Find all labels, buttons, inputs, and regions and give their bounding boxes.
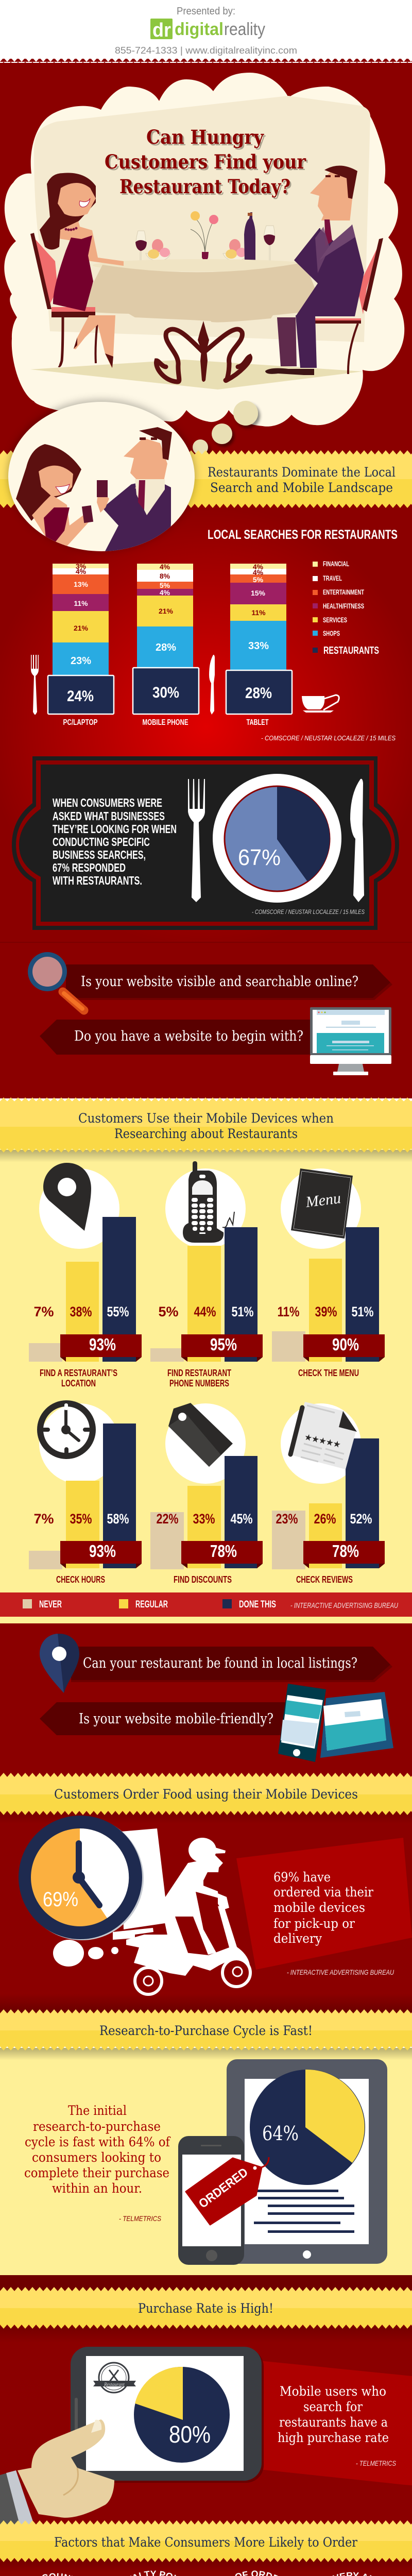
icon: restaurant badge — [93, 2363, 136, 2393]
logo: digital reality: dr — [152, 20, 171, 41]
chart legend: HEALTH/FITNESS — [323, 602, 364, 610]
bar chart: find discounts: FIND DISCOUNTS — [174, 1574, 232, 1585]
bar: pc laptop: 13% — [74, 580, 89, 588]
bar chart: find discounts: 45% — [231, 1511, 252, 1527]
panel: purchase rate note: restaurants have a — [279, 2415, 388, 2430]
bar: pc laptop — [48, 562, 114, 727]
panel: purchase rate note — [259, 2361, 412, 2485]
bar chart: phone numbers: PHONE NUMBERS — [169, 1378, 229, 1388]
clock chart 69 percent: 69% — [43, 1888, 78, 1911]
bar chart: phone numbers: 51% — [232, 1304, 253, 1319]
question banner: mobile friendly: Is your website mobile-friendly? — [79, 1711, 273, 1727]
panel: red note: delivery — [273, 1931, 322, 1946]
bar chart: check reviews: 23% — [276, 1511, 298, 1527]
heading text: Customers Use their Mobile Devices when — [78, 1111, 334, 1126]
illustration: hand holding tablet — [0, 2419, 114, 2524]
bar: pc laptop: 24% — [67, 688, 94, 705]
bar chart: check menu — [272, 1168, 385, 1378]
section heading band: mobile research — [0, 1097, 412, 1162]
bar: tablet — [226, 563, 292, 727]
question banner: mobile friendly — [40, 1702, 288, 1735]
plate and pie: 67% — [238, 845, 281, 870]
bar chart: check reviews: CHECK REVIEWS — [296, 1574, 353, 1585]
bar chart: check hours: 93% — [89, 1541, 116, 1561]
bar chart: check reviews: 26% — [314, 1511, 336, 1527]
question banner: have a website — [40, 1020, 314, 1055]
table — [79, 259, 323, 382]
logo: digital reality — [150, 19, 265, 41]
inner beige panel — [34, 96, 370, 342]
bar: mobile phone: 8% — [160, 572, 170, 580]
bar chart: check hours: 7% — [33, 1511, 54, 1527]
icon: price tag — [168, 1403, 233, 1467]
question banner: website visible: Is your website visible and searchable online? — [81, 974, 358, 990]
research to purchase text: consumers looking to — [32, 2150, 161, 2165]
table settings — [134, 211, 277, 267]
bar: pc laptop: 21% — [74, 624, 89, 632]
statistic text: ASKED WHAT BUSINESSES — [53, 809, 165, 823]
chart legend strip: NEVER — [39, 1599, 62, 1610]
icon: fork — [31, 655, 39, 715]
title — [105, 126, 306, 198]
bar: tablet: 11% — [251, 608, 266, 617]
bar chart: find discounts: 22% — [157, 1511, 178, 1527]
bar chart: check hours: CHECK HOURS — [56, 1574, 105, 1585]
section heading band: factors: Factors that Make Consumers More Likely to Order — [54, 2535, 357, 2550]
landscape tablet with pie: 80% — [169, 2421, 211, 2448]
bar chart: check reviews — [272, 1403, 385, 1585]
woman at table — [30, 173, 124, 368]
couple with phones circle — [8, 402, 195, 551]
bar chart: check menu: CHECK THE MENU — [298, 1368, 359, 1378]
source: - COMSCORE / NEUSTAR LOCALEZE / 15 MILES — [252, 908, 365, 916]
icon: knife — [350, 779, 364, 902]
bar chart: phone numbers — [150, 1168, 263, 1388]
chart legend: RESTAURANTS — [323, 645, 379, 656]
chart legend strip: REGULAR — [135, 1599, 168, 1610]
icon: fork — [188, 779, 205, 902]
chart legend — [313, 560, 379, 656]
icon: magnifier — [28, 952, 84, 1010]
icon: restaurant badge: Restaurant — [104, 2382, 125, 2387]
bar chart: check menu: 51% — [351, 1304, 374, 1319]
research to purchase text: complete their purchase — [24, 2165, 169, 2180]
bar chart: find discounts — [150, 1403, 263, 1585]
bar: mobile phone: 30% — [152, 684, 179, 701]
icon: coffee cup — [302, 695, 339, 713]
icon: menu — [291, 1168, 353, 1239]
question banner: website visible — [66, 964, 392, 1000]
header: presented by — [115, 6, 297, 56]
section heading band: order food — [0, 1773, 412, 1824]
phone and website: 855-724-1333 | www.digitalrealityinc.com — [115, 45, 297, 56]
source: comscore: - COMSCORE / NEUSTAR LOCALEZE / 15 MILES — [261, 734, 396, 742]
icon: review paper — [289, 1402, 357, 1469]
bar: mobile phone: 21% — [159, 607, 174, 615]
flowers — [191, 219, 214, 252]
bar chart: find location: 55% — [107, 1304, 129, 1319]
bar: tablet: 5% — [253, 575, 264, 584]
bar chart: check menu: 11% — [277, 1304, 300, 1319]
bar chart: phone numbers: FIND RESTAURANT — [167, 1368, 231, 1378]
section heading band: factors — [0, 2520, 412, 2573]
bar: pc laptop: 23% — [71, 655, 91, 667]
bar chart: phone numbers: 95% — [210, 1335, 237, 1354]
heading text — [78, 1111, 334, 1141]
chart legend: SHOPS — [323, 629, 340, 637]
icon: knife — [209, 655, 215, 715]
statistic text: BUSINESS SEARCHES, — [53, 848, 146, 861]
bar chart: find location: LOCATION — [61, 1378, 96, 1388]
bar chart: find discounts: 78% — [210, 1541, 237, 1561]
heading text: Researching about Restaurants — [114, 1126, 298, 1141]
question banner: local listings — [71, 1647, 392, 1682]
icon: navy map pin — [40, 1634, 79, 1693]
bar: mobile phone — [133, 563, 199, 727]
bar chart: check reviews: 78% — [332, 1541, 359, 1561]
chart legend: FINANCIAL — [323, 560, 349, 568]
panel: red note: ordered via their — [273, 1885, 373, 1900]
bar chart: check reviews: 52% — [350, 1511, 372, 1527]
man at table — [265, 165, 383, 375]
section heading band: research to purchase: Research-to-Purchase Cycle is Fast! — [99, 2023, 313, 2038]
panel: purchase rate note: high purchase rate — [278, 2430, 389, 2445]
chart legend: ENTERTAINMENT — [323, 588, 364, 596]
section heading band: purchase rate: Purchase Rate is High! — [138, 2301, 273, 2316]
question banner: have a website: Do you have a website to begin with? — [74, 1028, 303, 1044]
research to purchase text: The initial — [68, 2103, 127, 2118]
bar: pc laptop: 4% — [76, 567, 87, 575]
section heading band: restaurants dominate — [0, 450, 412, 508]
landscape tablet with pie — [71, 2347, 264, 2483]
bar chart: find location — [29, 1168, 142, 1388]
statistic text: WITH RESTAURANTS. — [53, 874, 142, 887]
cloud shape — [4, 73, 404, 427]
section heading band: research to purchase — [0, 2009, 412, 2060]
bar: pc laptop: PC/LAPTOP — [63, 718, 98, 727]
bar: tablet: 33% — [248, 640, 269, 652]
bar chart: check hours: 35% — [70, 1511, 92, 1527]
bar chart: phone numbers: 44% — [194, 1304, 216, 1319]
floor rug — [30, 360, 363, 389]
statistic text: THEY’RE LOOKING FOR WHEN — [53, 822, 177, 836]
title: Can Hungry — [146, 126, 264, 148]
statistic text: CONDUCTING SPECIFIC — [53, 835, 150, 849]
illustration: delivery scooter — [53, 1828, 250, 1994]
research to purchase text: within an hour. — [52, 2181, 142, 2196]
tablet with pie chart: 64% — [262, 2122, 299, 2145]
statistic text: WHEN CONSUMERS WERE — [53, 796, 162, 809]
bar: tablet: 4% — [253, 563, 264, 571]
icon: menu: Menu — [304, 1190, 342, 1211]
clock chart 69 percent — [19, 1816, 144, 1940]
presented by text: Presented by: — [177, 6, 235, 17]
thought bubbles — [175, 401, 258, 458]
chart legend: TRAVEL — [323, 574, 342, 582]
bar chart: find location: 38% — [70, 1304, 92, 1319]
bar chart: find discounts: 33% — [193, 1511, 215, 1527]
plate and pie — [213, 774, 341, 903]
panel: purchase rate note: search for — [303, 2399, 363, 2414]
title: Customers Find your — [105, 150, 306, 173]
source: - TELMETRICS — [119, 2214, 162, 2223]
research to purchase text — [24, 2103, 171, 2196]
bar: tablet: 4% — [253, 568, 264, 577]
bar chart: check menu: 39% — [315, 1304, 337, 1319]
logo: digital reality: reality — [224, 20, 265, 39]
bar chart: find location: 93% — [89, 1335, 116, 1354]
exhaust puffs — [53, 1940, 84, 1967]
bar: pc laptop: 11% — [74, 599, 88, 607]
bar: mobile phone: 5% — [160, 581, 170, 589]
logo: digital reality: digital — [175, 20, 224, 39]
icon: desktop monitor — [310, 1007, 391, 1075]
research to purchase text: cycle is fast with 64% of — [25, 2134, 171, 2149]
bar chart: check hours: 58% — [107, 1511, 129, 1527]
bar: tablet: 15% — [251, 589, 266, 597]
source: - TELMETRICS — [356, 2459, 397, 2467]
icon: map pin — [43, 1163, 91, 1231]
panel: red note — [236, 1838, 412, 1970]
man with phone — [97, 427, 172, 551]
section heading band: order food: Customers Order Food using their Mobile Devices — [54, 1787, 358, 1802]
chart legend strip: DONE THIS — [239, 1599, 276, 1610]
icon: review paper: ★★★★★ — [303, 1432, 341, 1450]
panel: red note: for pick-up or — [273, 1916, 355, 1931]
icon: clock — [40, 1403, 93, 1456]
bar: mobile phone: MOBILE PHONE — [142, 718, 188, 727]
bar: mobile phone: 4% — [160, 588, 170, 597]
bar: pc laptop: 3% — [76, 562, 87, 570]
bar: mobile phone: 4% — [160, 563, 170, 571]
icon: phone and tablet — [278, 1684, 393, 1762]
smartphone with ordered tag: ORDERED — [196, 2165, 251, 2211]
woman with phone — [16, 444, 93, 546]
panel: placemat statistic — [12, 756, 399, 930]
bar: mobile phone: 28% — [156, 642, 176, 653]
smartphone with ordered tag — [178, 2136, 269, 2265]
chart legend: SERVICES — [323, 616, 347, 624]
panel: red note: 69% have — [273, 1870, 331, 1885]
bar chart: check hours — [29, 1403, 142, 1585]
question banner: local listings: Can your restaurant be found in local listings? — [83, 1655, 357, 1671]
chart legend strip — [0, 1592, 412, 1617]
bar: tablet: TABLET — [246, 718, 269, 727]
bar chart: find location: 7% — [33, 1304, 54, 1319]
research to purchase text: research-to-purchase — [33, 2119, 161, 2134]
panel: purchase rate note: Mobile users who — [280, 2384, 386, 2399]
section heading band: purchase rate — [0, 2287, 412, 2343]
bar chart: find location: FIND A RESTAURANT’S — [40, 1368, 117, 1378]
bar: tablet: 28% — [245, 685, 272, 702]
heading text: Search and Mobile Landscape — [210, 480, 393, 495]
bar chart: phone numbers: 5% — [158, 1304, 179, 1319]
statistic text: 67% RESPONDED — [53, 861, 126, 874]
heading text — [208, 465, 396, 495]
bar chart: check menu: 90% — [332, 1335, 359, 1354]
title: Restaurant Today? — [119, 175, 290, 198]
icon: cordless phone — [183, 1161, 234, 1243]
stacked bar chart: local searches — [48, 562, 292, 727]
tablet with pie chart — [227, 2059, 387, 2264]
statistic text — [53, 796, 177, 887]
panel: red note: mobile devices — [273, 1900, 365, 1915]
title cloud illustration — [4, 73, 404, 427]
